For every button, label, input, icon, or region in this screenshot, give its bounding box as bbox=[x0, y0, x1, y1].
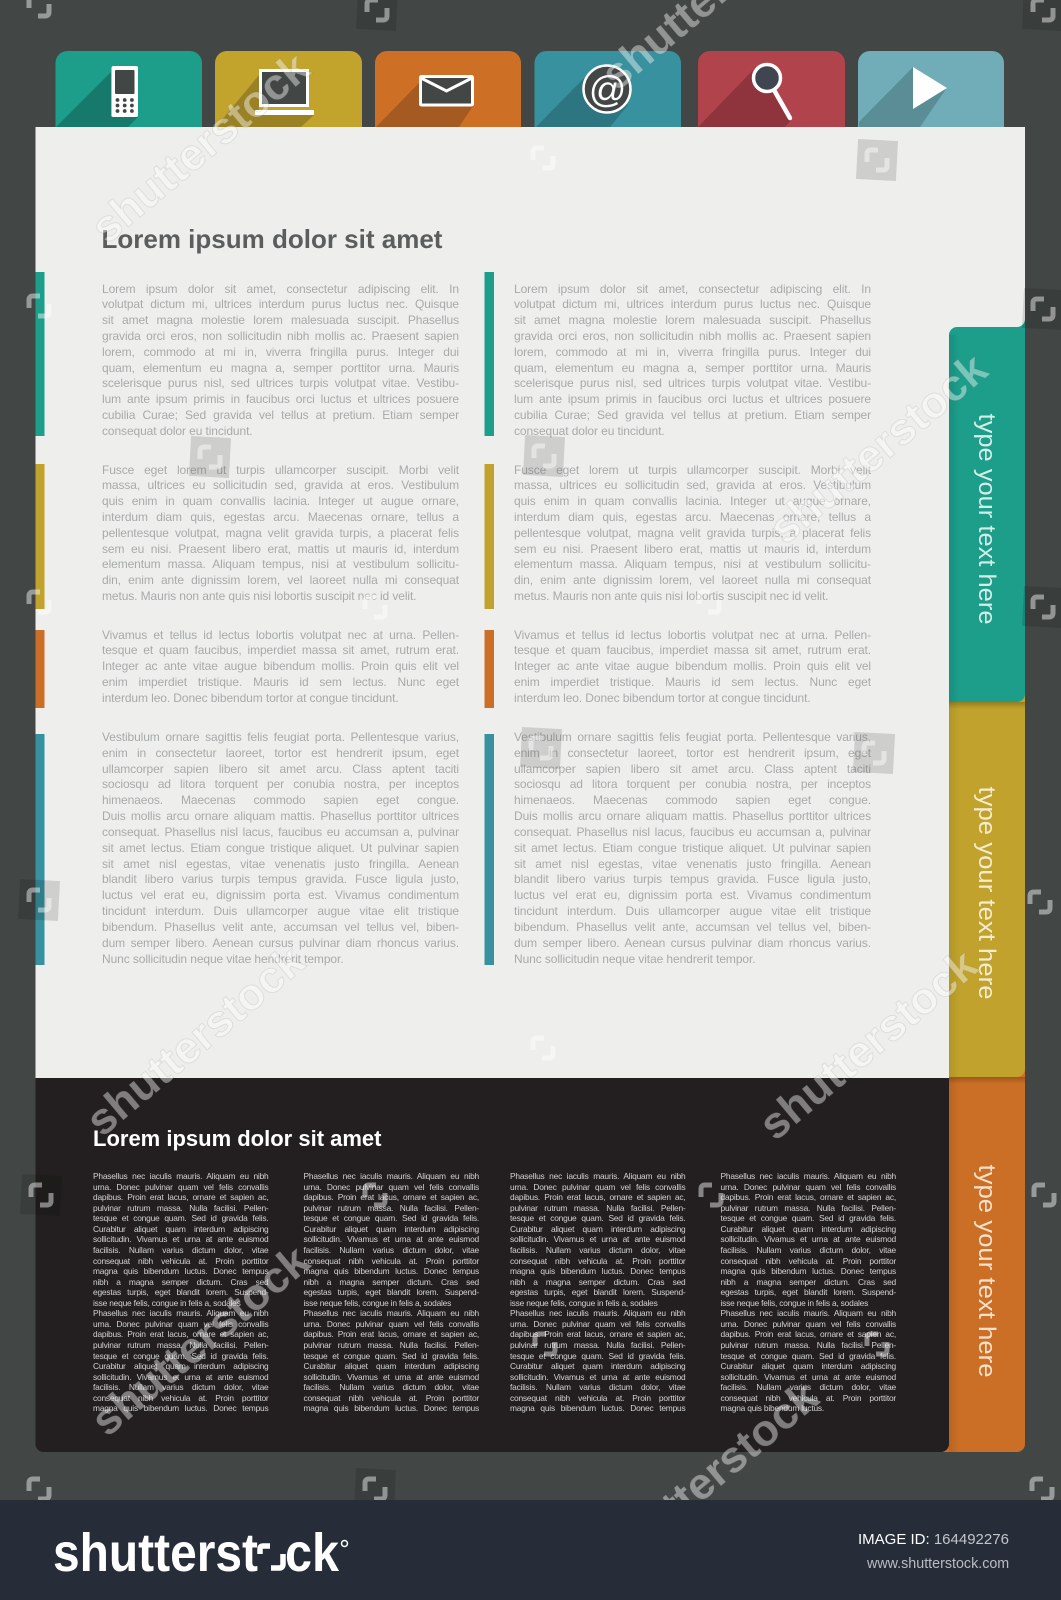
tab: phone bbox=[56, 51, 202, 127]
text block: dark column 4: urna. Donec pulvinar quam vel felis convallis bbox=[720, 1319, 896, 1329]
text block: right column paragraph 4: ullamcorper sapien libero sit amet arcu. Class aptent taciti bbox=[514, 762, 871, 776]
text block: dark column 2: facilisis. Nullam varius dictum dolor, vitae bbox=[304, 1245, 479, 1255]
text block: left column paragraph 2: sem eu nisi. Praesent libero erat, mattis ut mauris id, interdum bbox=[102, 542, 459, 556]
text block: dark column 3: Curabitur aliquet quam interdum adipiscing bbox=[510, 1224, 686, 1234]
text block: dark column 3: nibh a magna semper dictum. Cras sed bbox=[510, 1277, 686, 1287]
text block: left column paragraph 4: Nunc sollicitudin neque vitae hendrerit tempor. bbox=[102, 952, 343, 966]
text block: dark column 4: sollicitudin. Vivamus et urna at ante euismod bbox=[720, 1372, 896, 1382]
text block: dark column 3: sollicitudin. Vivamus et urna at ante euismod bbox=[510, 1234, 686, 1244]
text block: left column paragraph 4: sit amet lectus. Etiam congue tristique aliquet. Ut pulvinar sapien bbox=[102, 841, 459, 855]
footer url: www.shutterstock.com bbox=[867, 1556, 1009, 1572]
text block: left column paragraph 1: cubilia Curae; Sed gravida vel tellus at pretium. Etiam semper bbox=[102, 408, 459, 422]
text block: dark column 2: Curabitur aliquet quam interdum adipiscing bbox=[304, 1224, 479, 1234]
text block: dark column 2: magna quis bibendum luctus. Donec tempus bbox=[304, 1403, 479, 1413]
text block: dark column 4: consequat nibh vehicula at. Proin porttitor bbox=[720, 1256, 896, 1266]
text block: dark column 1: pulvinar rutrum massa. Nulla facilisi. Pellen- bbox=[93, 1203, 268, 1213]
icon: envelope bbox=[420, 76, 472, 105]
text block: right column paragraph 4: Nunc sollicitudin neque vitae hendrerit tempor. bbox=[514, 952, 755, 966]
text block: right column paragraph 3: interdum leo. Donec bibendum tortor at congue tincidunt. bbox=[514, 691, 811, 705]
text block: left column paragraph 4: dum semper libero. Aenean cursus pulvinar diam rhoncus varius. bbox=[102, 936, 459, 950]
text block: left column paragraph 1: quam, elementum eu magna a, semper porttitor urna. Mauris bbox=[102, 361, 459, 375]
text block: left column paragraph 4: luctus vel erat eu, dignissim porta est. Vivamus condimentum bbox=[102, 888, 459, 902]
tab: play bbox=[858, 51, 1004, 127]
watermark overlay: shutterstock bbox=[77, 936, 314, 1146]
text block: right column paragraph 1: cubilia Curae; Sed gravida vel tellus at pretium. Etiam semper bbox=[514, 408, 871, 422]
text block: dark column 1: pulvinar rutrum massa. Nulla facilisi. Pellen- bbox=[93, 1340, 268, 1350]
text block: dark column 4: magna quis bibendum luctus. bbox=[720, 1403, 824, 1413]
text block: right column paragraph 4: sit amet lectus. Etiam congue tristique aliquet. Ut pulvinar sapien bbox=[514, 841, 871, 855]
text block: dark column 2: consequat nibh vehicula at. Proin porttitor bbox=[304, 1256, 479, 1266]
text block: dark column 1: consequat nibh vehicula at. Proin porttitor bbox=[93, 1393, 268, 1403]
text block: dark column 4: Phasellus nec iaculis mauris. Aliquam eu nibh bbox=[720, 1171, 896, 1181]
text block: dark column 3: sollicitudin. Vivamus et urna at ante euismod bbox=[510, 1372, 686, 1382]
text block: dark column 3: urna. Donec pulvinar quam vel felis convallis bbox=[510, 1182, 686, 1192]
text block: dark column 3: Curabitur aliquet quam interdum adipiscing bbox=[510, 1361, 686, 1371]
text block: dark column 4: pulvinar rutrum massa. Nulla facilisi. Pellen- bbox=[720, 1203, 896, 1213]
text block: dark column 3 bbox=[510, 1171, 686, 1413]
text block: left column paragraph 3: tesque et quam faucibus, imperdiet massa sit amet, rutrum erat. bbox=[102, 643, 459, 657]
text block: dark column 1: magna quis bibendum luctus. Donec tempus bbox=[93, 1266, 268, 1276]
text block: right column paragraph 2: elementum massa. Aliquam tempus, nisi at vestibulum sollicitu- bbox=[514, 557, 871, 571]
text block: right column paragraph 4: dum semper libero. Aenean cursus pulvinar diam rhoncus varius. bbox=[514, 936, 871, 950]
text block: dark column 1: egestas turpis, eget blandit lorem. Suspend- bbox=[93, 1287, 268, 1297]
text block: right column paragraph 4: consequat. Phasellus nisl lacus, faucibus eu accumsan a, pulvinar bbox=[514, 825, 871, 839]
text block: dark column 2: dapibus. Proin erat lacus, ornare et sapien ac, bbox=[304, 1329, 479, 1339]
text block: dark column 2: facilisis. Nullam varius dictum dolor, vitae bbox=[304, 1382, 479, 1392]
text block: dark column 3: pulvinar rutrum massa. Nulla facilisi. Pellen- bbox=[510, 1340, 686, 1350]
text block: dark column 2: tesque et congue quam. Sed id gravida felis. bbox=[304, 1351, 479, 1361]
text block: right column paragraph 4: luctus vel erat eu, dignissim porta est. Vivamus condimentum bbox=[514, 888, 871, 902]
text block: right column paragraph 2: metus. Mauris non ante quis nisi lobortis suscipit nec id velit. bbox=[514, 589, 828, 603]
text block: dark column 1: urna. Donec pulvinar quam vel felis convallis bbox=[93, 1182, 268, 1192]
text block: dark column 2: magna quis bibendum luctus. Donec tempus bbox=[304, 1266, 479, 1276]
text block: dark column 2: egestas turpis, eget blandit lorem. Suspend- bbox=[304, 1287, 479, 1297]
text block: dark column 3: egestas turpis, eget blandit lorem. Suspend- bbox=[510, 1287, 686, 1297]
text block: right column paragraph 1: quam, elementum eu magna a, semper porttitor urna. Mauris bbox=[514, 361, 871, 375]
icon: laptop bbox=[255, 70, 314, 115]
text block: dark column 3: Phasellus nec iaculis mauris. Aliquam eu nibh bbox=[510, 1171, 686, 1181]
text block: left column paragraph 4: sit amet nisl egestas, vitae venenatis justo fringilla. Aenean bbox=[102, 857, 459, 871]
text block: dark column 4: egestas turpis, eget blandit lorem. Suspend- bbox=[720, 1287, 896, 1297]
text block: right column paragraph 3: Integer ac ante vitae augue bibendum mollis. Proin quis elit vel bbox=[514, 659, 871, 673]
text block: right column paragraph 1: Lorem ipsum dolor sit amet, consectetur adipiscing elit. In bbox=[514, 282, 871, 296]
text block: left column paragraph 3: Integer ac ante vitae augue bibendum mollis. Proin quis elit vel bbox=[102, 659, 459, 673]
text block: right column paragraph 4 bbox=[514, 730, 871, 966]
text block: left column paragraph 4: Vestibulum ornare sagittis felis feugiat porta. Pellentesque varius, bbox=[102, 730, 459, 744]
text block: left column paragraph 2: massa, ultrices eu sollicitudin sed, gravida at eros. Vestibulum bbox=[102, 478, 459, 492]
icon: phone bbox=[112, 66, 138, 117]
tab label: teal: type your text here bbox=[973, 413, 1000, 625]
text block: left column paragraph 1: scelerisque purus nisl, sed ultrices turpis volutpat vitae. Vestibu- bbox=[102, 376, 459, 390]
text block: dark column 2: sollicitudin. Vivamus et urna at ante euismod bbox=[304, 1234, 479, 1244]
text block: dark column 4: isse neque felis, congue in felis a, sodales bbox=[720, 1298, 868, 1308]
text block: dark column 2: tesque et congue quam. Sed id gravida felis. bbox=[304, 1213, 479, 1223]
text block: dark column 2: nibh a magna semper dictum. Cras sed bbox=[304, 1277, 479, 1287]
text block: dark column 2: pulvinar rutrum massa. Nulla facilisi. Pellen- bbox=[304, 1340, 479, 1350]
text block: right column paragraph 3: enim imperdiet tristique. Mauris id sem lectus. Nunc eget bbox=[514, 675, 871, 689]
text block: right column paragraph 2 bbox=[514, 462, 871, 603]
text block: dark column 4 bbox=[720, 1171, 896, 1413]
text block: left column paragraph 1: sit amet magna molestie lorem malesuada suscipit. Phasellus bbox=[102, 313, 459, 327]
icon: magnifier bbox=[754, 64, 790, 118]
tab: search bbox=[698, 51, 845, 127]
accent bars: left column bbox=[36, 272, 44, 965]
text block: dark column 3: urna. Donec pulvinar quam vel felis convallis bbox=[510, 1319, 686, 1329]
text block: left column paragraph 4: sociosqu ad litora torquent per conubia nostra, per inceptos bbox=[102, 777, 459, 791]
text block: dark column 3: facilisis. Nullam varius dictum dolor, vitae bbox=[510, 1382, 686, 1392]
text block: right column paragraph 4: sociosqu ad litora torquent per conubia nostra, per inceptos bbox=[514, 777, 871, 791]
text block: dark column 2: Phasellus nec iaculis mauris. Aliquam eu nibh bbox=[304, 1308, 479, 1318]
watermark overlay: shutterstock bbox=[82, 1236, 319, 1446]
text block: dark column 3: facilisis. Nullam varius dictum dolor, vitae bbox=[510, 1245, 686, 1255]
text block: dark column 1: magna quis bibendum luctus. Donec tempus bbox=[93, 1403, 268, 1413]
text block: dark column 3: isse neque felis, congue in felis a, sodales bbox=[510, 1298, 658, 1308]
text block: right column paragraph 1: lum ante ipsum primis in faucibus orci luctus et ultrices posuere bbox=[514, 392, 871, 406]
footer image id: IMAGE ID: 164492276 bbox=[858, 1530, 1009, 1548]
text block: right column paragraph 3: tesque et quam faucibus, imperdiet massa sit amet, rutrum erat. bbox=[514, 643, 871, 657]
text block: dark column 1: dapibus. Proin erat lacus, ornare et sapien ac, bbox=[93, 1192, 268, 1202]
watermark overlay: shutterstock bbox=[750, 940, 987, 1150]
text block: left column paragraph 1 bbox=[102, 282, 459, 438]
text block: dark column 4: facilisis. Nullam varius dictum dolor, vitae bbox=[720, 1245, 896, 1255]
text block: dark column 2: urna. Donec pulvinar quam vel felis convallis bbox=[304, 1182, 479, 1192]
text block: dark column 1: Phasellus nec iaculis mauris. Aliquam eu nibh bbox=[93, 1308, 268, 1318]
text block: right column paragraph 2: din, enim ante dignissim lorem, vel laoreet nulla mi consequat bbox=[514, 573, 871, 587]
text block: dark column 3: Phasellus nec iaculis mauris. Aliquam eu nibh bbox=[510, 1308, 686, 1318]
text block: dark column 1: dapibus. Proin erat lacus, ornare et sapien ac, bbox=[93, 1329, 268, 1339]
text block: right column paragraph 2: quis enim in quam convallis lacinia. Integer ut augue ornare, bbox=[514, 494, 871, 508]
text block: dark column 4: Curabitur aliquet quam interdum adipiscing bbox=[720, 1361, 896, 1371]
text block: right column paragraph 4: bibendum. Phasellus velit ante, accumsan vel tellus vel, biben- bbox=[514, 920, 871, 934]
watermark overlay: shutterstock bbox=[591, 1372, 828, 1582]
text block: dark column 4: urna. Donec pulvinar quam vel felis convallis bbox=[720, 1182, 896, 1192]
text block: dark column 1: Curabitur aliquet quam interdum adipiscing bbox=[93, 1224, 268, 1234]
text block: dark column 1: facilisis. Nullam varius dictum dolor, vitae bbox=[93, 1245, 268, 1255]
text block: dark column 2: isse neque felis, congue in felis a, sodales bbox=[304, 1298, 451, 1308]
text block: left column paragraph 1: lum ante ipsum primis in faucibus orci luctus et ultrices posuere bbox=[102, 392, 459, 406]
text block: left column paragraph 1: gravida orci eros, non sollicitudin nibh mollis ac. Praesent sapien bbox=[102, 329, 459, 343]
text block: left column paragraph 4: Duis mollis arcu ornare aliquam mattis. Phasellus porttitor ultrices bbox=[102, 809, 459, 823]
accent bars: right column bbox=[484, 272, 494, 965]
text block: left column paragraph 2: Fusce eget lorem ut turpis ullamcorper suscipit. Morbi velit bbox=[102, 462, 459, 476]
icon: at sign bbox=[584, 66, 630, 112]
text block: left column paragraph 2: din, enim ante dignissim lorem, vel laoreet nulla mi consequat bbox=[102, 573, 459, 587]
text block: dark column 1: facilisis. Nullam varius dictum dolor, vitae bbox=[93, 1382, 268, 1392]
text block: right column paragraph 4: tincidunt interdum. Duis ullamcorper augue vitae elit tristique bbox=[514, 904, 871, 918]
watermark overlay: shutterstock bbox=[760, 344, 997, 554]
text block: left column paragraph 2: interdum diam quis, egestas arcu. Maecenas ornare, tellus a bbox=[102, 510, 459, 524]
text block: right column paragraph 1: gravida orci eros, non sollicitudin nibh mollis ac. Praesent sapien bbox=[514, 329, 871, 343]
text block: left column paragraph 4 bbox=[102, 730, 459, 966]
text block: dark column 3: pulvinar rutrum massa. Nulla facilisi. Pellen- bbox=[510, 1203, 686, 1213]
text block: right column paragraph 2: interdum diam quis, egestas arcu. Maecenas ornare, tellus a bbox=[514, 510, 871, 524]
text block: left column paragraph 2: metus. Mauris non ante quis nisi lobortis suscipit nec id velit. bbox=[102, 589, 416, 603]
icon: at sign: @ bbox=[588, 69, 626, 110]
text block: dark column 3: consequat nibh vehicula at. Proin porttitor bbox=[510, 1256, 686, 1266]
text block: dark column 3: magna quis bibendum luctus. Donec tempus bbox=[510, 1266, 686, 1276]
heading: dark sheet: Lorem ipsum dolor sit amet bbox=[93, 1126, 382, 1151]
text block: left column paragraph 3 bbox=[102, 628, 459, 705]
text block: dark column 1: sollicitudin. Vivamus et urna at ante euismod bbox=[93, 1234, 268, 1244]
text block: dark column 4: Phasellus nec iaculis mauris. Aliquam eu nibh bbox=[720, 1308, 896, 1318]
text block: dark column 3: dapibus. Proin erat lacus, ornare et sapien ac, bbox=[510, 1192, 686, 1202]
text block: dark column 3: dapibus. Proin erat lacus, ornare et sapien ac, bbox=[510, 1329, 686, 1339]
text block: right column paragraph 4: blandit libero varius turpis tempus gravida. Fusce ligula justo, bbox=[514, 872, 871, 886]
tab label: yellow: type your text here bbox=[973, 786, 1000, 1000]
text block: left column paragraph 4: tincidunt interdum. Duis ullamcorper augue vitae elit tristique bbox=[102, 904, 459, 918]
text block: dark column 1: nibh a magna semper dictum. Cras sed bbox=[93, 1277, 268, 1287]
icon: play triangle bbox=[913, 67, 947, 109]
tab: laptop bbox=[215, 51, 362, 127]
text block: right column paragraph 2: massa, ultrices eu sollicitudin sed, gravida at eros. Vestibulum bbox=[514, 478, 871, 492]
text block: left column paragraph 4: enim in consectetur laoreet, tortor est hendrerit ipsum, eget bbox=[102, 746, 459, 760]
tab label: orange: type your text here bbox=[973, 1164, 1000, 1378]
text block: right column paragraph 4: enim in consectetur laoreet, tortor est hendrerit ipsum, eget bbox=[514, 746, 871, 760]
text block: left column paragraph 3: Vivamus et tellus id lectus lobortis volutpat nec at urna. Pellen- bbox=[102, 628, 459, 642]
text block: dark column 1 bbox=[93, 1171, 269, 1413]
text block: left column paragraph 2 bbox=[102, 462, 459, 603]
text block: left column paragraph 1: lorem, commodo at mi in, viverra fringilla purus. Integer dui bbox=[102, 345, 459, 359]
text block: dark column 4: consequat nibh vehicula at. Proin porttitor bbox=[720, 1393, 896, 1403]
watermark overlay: shutterstock bbox=[82, 43, 319, 253]
text block: left column paragraph 2: pellentesque volutpat, magna velit gravida turpis, a placerat felis bbox=[102, 526, 459, 540]
text block: dark column 4: magna quis bibendum luctus. Donec tempus bbox=[720, 1266, 896, 1276]
text block: left column paragraph 4: himenaeos. Maecenas commodo sapien eget congue. bbox=[102, 793, 459, 807]
heading: light sheet: Lorem ipsum dolor sit amet bbox=[102, 224, 442, 254]
text block: dark column 3: tesque et congue quam. Sed id gravida felis. bbox=[510, 1351, 686, 1361]
text block: dark column 1: Phasellus nec iaculis mauris. Aliquam eu nibh bbox=[93, 1171, 268, 1181]
text block: dark column 1: consequat nibh vehicula at. Proin porttitor bbox=[93, 1256, 268, 1266]
text block: right column paragraph 1: scelerisque purus nisl, sed ultrices turpis volutpat vitae. Vestibu- bbox=[514, 376, 871, 390]
text block: dark column 3: tesque et congue quam. Sed id gravida felis. bbox=[510, 1213, 686, 1223]
text block: right column paragraph 1: lorem, commodo at mi in, viverra fringilla purus. Integer dui bbox=[514, 345, 871, 359]
text block: right column paragraph 1 bbox=[514, 282, 871, 438]
text block: dark column 1: urna. Donec pulvinar quam vel felis convallis bbox=[93, 1319, 268, 1329]
panel: dark content sheet bbox=[36, 1078, 949, 1452]
tab: envelope bbox=[375, 51, 521, 127]
text block: right column paragraph 3 bbox=[514, 628, 871, 705]
text block: dark column 1: sollicitudin. Vivamus et urna at ante euismod bbox=[93, 1372, 268, 1382]
text block: right column paragraph 2: Fusce eget lorem ut turpis ullamcorper suscipit. Morbi velit bbox=[514, 462, 871, 476]
text block: dark column 4: pulvinar rutrum massa. Nulla facilisi. Pellen- bbox=[720, 1340, 896, 1350]
side tab: yellow bbox=[949, 694, 1025, 1077]
text block: left column paragraph 4: ullamcorper sapien libero sit amet arcu. Class aptent taciti bbox=[102, 762, 459, 776]
footer bar bbox=[0, 1500, 1061, 1600]
footer logo: ck bbox=[285, 1523, 340, 1583]
side tab: teal bbox=[949, 319, 1025, 702]
text block: dark column 3: magna quis bibendum luctus. Donec tempus bbox=[510, 1403, 686, 1413]
text block: dark column 2: dapibus. Proin erat lacus, ornare et sapien ac, bbox=[304, 1192, 479, 1202]
text block: right column paragraph 2: sem eu nisi. Praesent libero erat, mattis ut mauris id, interdum bbox=[514, 542, 871, 556]
text block: dark column 2: consequat nibh vehicula at. Proin porttitor bbox=[304, 1393, 479, 1403]
text block: dark column 1: tesque et congue quam. Sed id gravida felis. bbox=[93, 1213, 268, 1223]
text block: right column paragraph 4: sit amet nisl egestas, vitae venenatis justo fringilla. Aenean bbox=[514, 857, 871, 871]
text block: dark column 1: Curabitur aliquet quam interdum adipiscing bbox=[93, 1361, 268, 1371]
text block: left column paragraph 3: enim imperdiet tristique. Mauris id sem lectus. Nunc eget bbox=[102, 675, 459, 689]
text block: dark column 2: pulvinar rutrum massa. Nulla facilisi. Pellen- bbox=[304, 1203, 479, 1213]
text block: dark column 2 bbox=[304, 1171, 480, 1413]
text block: right column paragraph 1: sit amet magna molestie lorem malesuada suscipit. Phasellus bbox=[514, 313, 871, 327]
text block: dark column 4: tesque et congue quam. Sed id gravida felis. bbox=[720, 1351, 896, 1361]
text block: left column paragraph 1: Lorem ipsum dolor sit amet, consectetur adipiscing elit. In bbox=[102, 282, 459, 296]
side tab: orange bbox=[938, 1066, 1025, 1452]
text block: left column paragraph 2: quis enim in quam convallis lacinia. Integer ut augue ornare, bbox=[102, 494, 459, 508]
text block: right column paragraph 2: pellentesque volutpat, magna velit gravida turpis, a placerat felis bbox=[514, 526, 871, 540]
text block: dark column 4: dapibus. Proin erat lacus, ornare et sapien ac, bbox=[720, 1192, 896, 1202]
text block: left column paragraph 2: elementum massa. Aliquam tempus, nisi at vestibulum sollicitu- bbox=[102, 557, 459, 571]
text block: dark column 4: facilisis. Nullam varius dictum dolor, vitae bbox=[720, 1382, 896, 1392]
text block: left column paragraph 1: consequat dolor eu tincidunt. bbox=[102, 424, 253, 438]
text block: left column paragraph 4: consequat. Phasellus nisl lacus, faucibus eu accumsan a, pulvinar bbox=[102, 825, 459, 839]
text block: right column paragraph 1: volutpat dictum mi, ultrices interdum purus luctus nec. Quisque bbox=[514, 297, 871, 311]
text block: dark column 2: sollicitudin. Vivamus et urna at ante euismod bbox=[304, 1372, 479, 1382]
text block: dark column 4: tesque et congue quam. Sed id gravida felis. bbox=[720, 1213, 896, 1223]
panel: light content sheet bbox=[36, 127, 1025, 1078]
text block: dark column 2: Curabitur aliquet quam interdum adipiscing bbox=[304, 1361, 479, 1371]
text block: dark column 1: isse neque felis, congue in felis a, sodales bbox=[93, 1298, 241, 1308]
text block: left column paragraph 4: bibendum. Phasellus velit ante, accumsan vel tellus vel, biben- bbox=[102, 920, 459, 934]
footer logo: shutterst bbox=[53, 1523, 258, 1583]
text block: right column paragraph 1: consequat dolor eu tincidunt. bbox=[514, 424, 665, 438]
tab: at sign bbox=[534, 51, 681, 127]
text block: right column paragraph 4: himenaeos. Maecenas commodo sapien eget congue. bbox=[514, 793, 871, 807]
text block: left column paragraph 4: blandit libero varius turpis tempus gravida. Fusce ligula justo, bbox=[102, 872, 459, 886]
text block: dark column 4: nibh a magna semper dictum. Cras sed bbox=[720, 1277, 896, 1287]
text block: left column paragraph 1: volutpat dictum mi, ultrices interdum purus luctus nec. Quisque bbox=[102, 297, 459, 311]
text block: right column paragraph 4: Vestibulum ornare sagittis felis feugiat porta. Pellentesque varius, bbox=[514, 730, 871, 744]
text block: dark column 4: sollicitudin. Vivamus et urna at ante euismod bbox=[720, 1234, 896, 1244]
text block: dark column 4: dapibus. Proin erat lacus, ornare et sapien ac, bbox=[720, 1329, 896, 1339]
text block: dark column 2: Phasellus nec iaculis mauris. Aliquam eu nibh bbox=[304, 1171, 479, 1181]
text block: dark column 2: urna. Donec pulvinar quam vel felis convallis bbox=[304, 1319, 479, 1329]
text block: left column paragraph 3: interdum leo. Donec bibendum tortor at congue tincidunt. bbox=[102, 691, 399, 705]
text block: dark column 1: tesque et congue quam. Sed id gravida felis. bbox=[93, 1351, 268, 1361]
text block: right column paragraph 3: Vivamus et tellus id lectus lobortis volutpat nec at urna. Pellen- bbox=[514, 628, 871, 642]
text block: right column paragraph 4: Duis mollis arcu ornare aliquam mattis. Phasellus porttitor ultrices bbox=[514, 809, 871, 823]
text block: dark column 4: Curabitur aliquet quam interdum adipiscing bbox=[720, 1224, 896, 1234]
text block: dark column 3: consequat nibh vehicula at. Proin porttitor bbox=[510, 1393, 686, 1403]
